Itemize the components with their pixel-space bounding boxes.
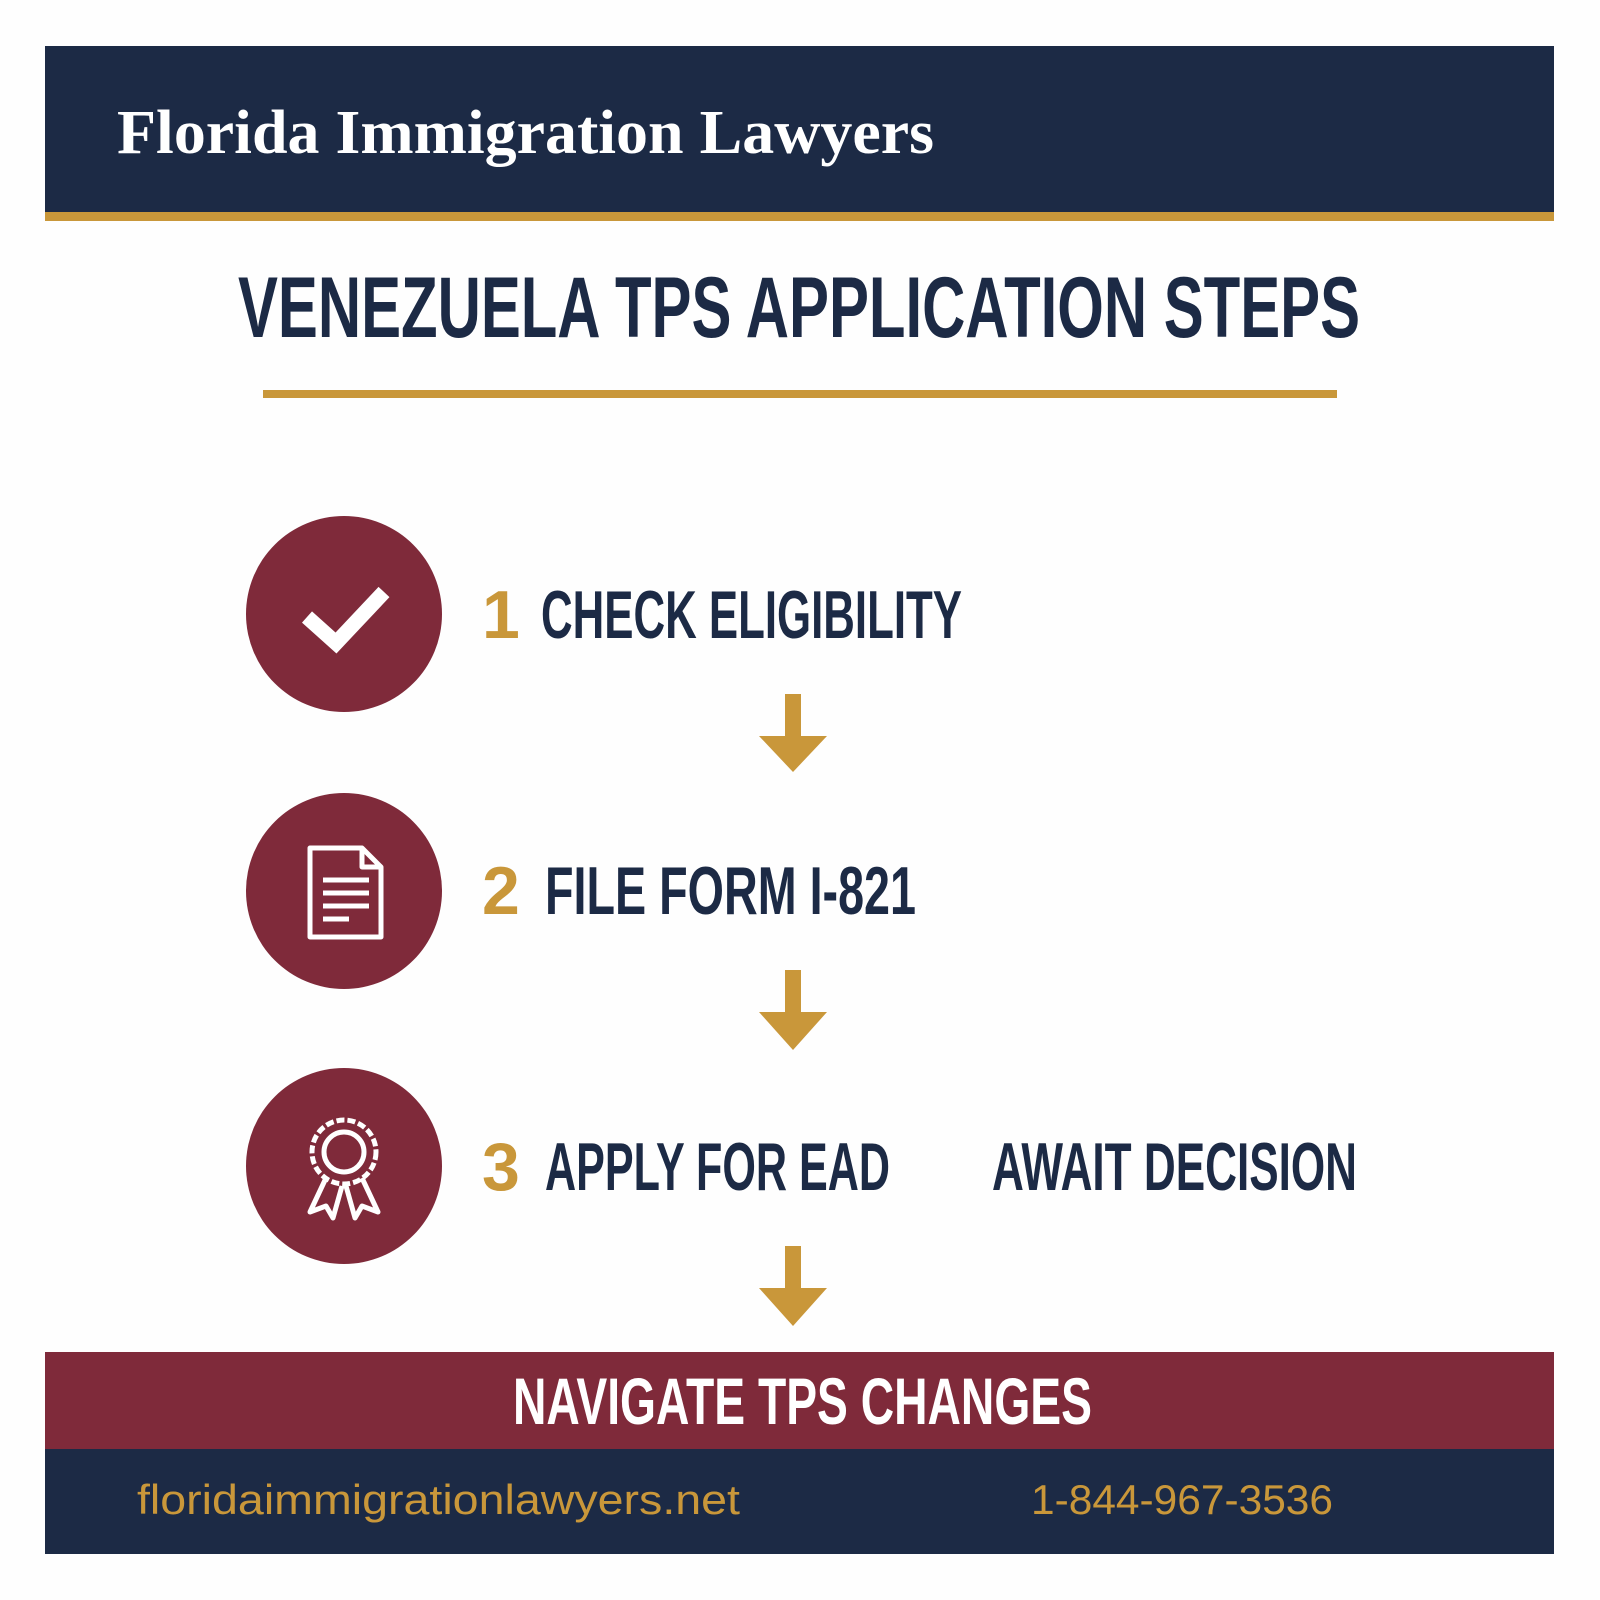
arrow 2 [759,970,827,1050]
await decision: AWAIT DECISION [992,1129,1357,1205]
icon: award ribbon circle [246,1068,442,1264]
step 2: FILE FORM I-821 [545,853,916,929]
step 3: APPLY FOR EAD [545,1129,890,1205]
header title: Florida Immigration Lawyers [117,99,934,167]
step 2: 2 [482,853,520,929]
footer contact: 1-844-967-3536 [1031,1476,1333,1523]
icon: checkmark circle [246,516,442,712]
arrow 1 [759,694,827,772]
step 3 [246,1068,1357,1264]
footer contact [45,1449,1554,1554]
step 1: 1 [482,577,520,653]
footer contact: floridaimmigrationlawyers.net [137,1476,740,1523]
icon: document circle [246,793,442,989]
header bar [45,46,1554,221]
step 1: CHECK ELIGIBILITY [541,577,962,653]
step 3: 3 [482,1129,520,1205]
arrow 3 [759,1246,827,1326]
title underline [263,390,1337,398]
banner: navigate TPS changes [45,1352,1554,1449]
banner: navigate TPS changes: NAVIGATE TPS CHANGES [513,1364,1092,1438]
step 2 [246,793,916,989]
step 1 [246,516,962,712]
